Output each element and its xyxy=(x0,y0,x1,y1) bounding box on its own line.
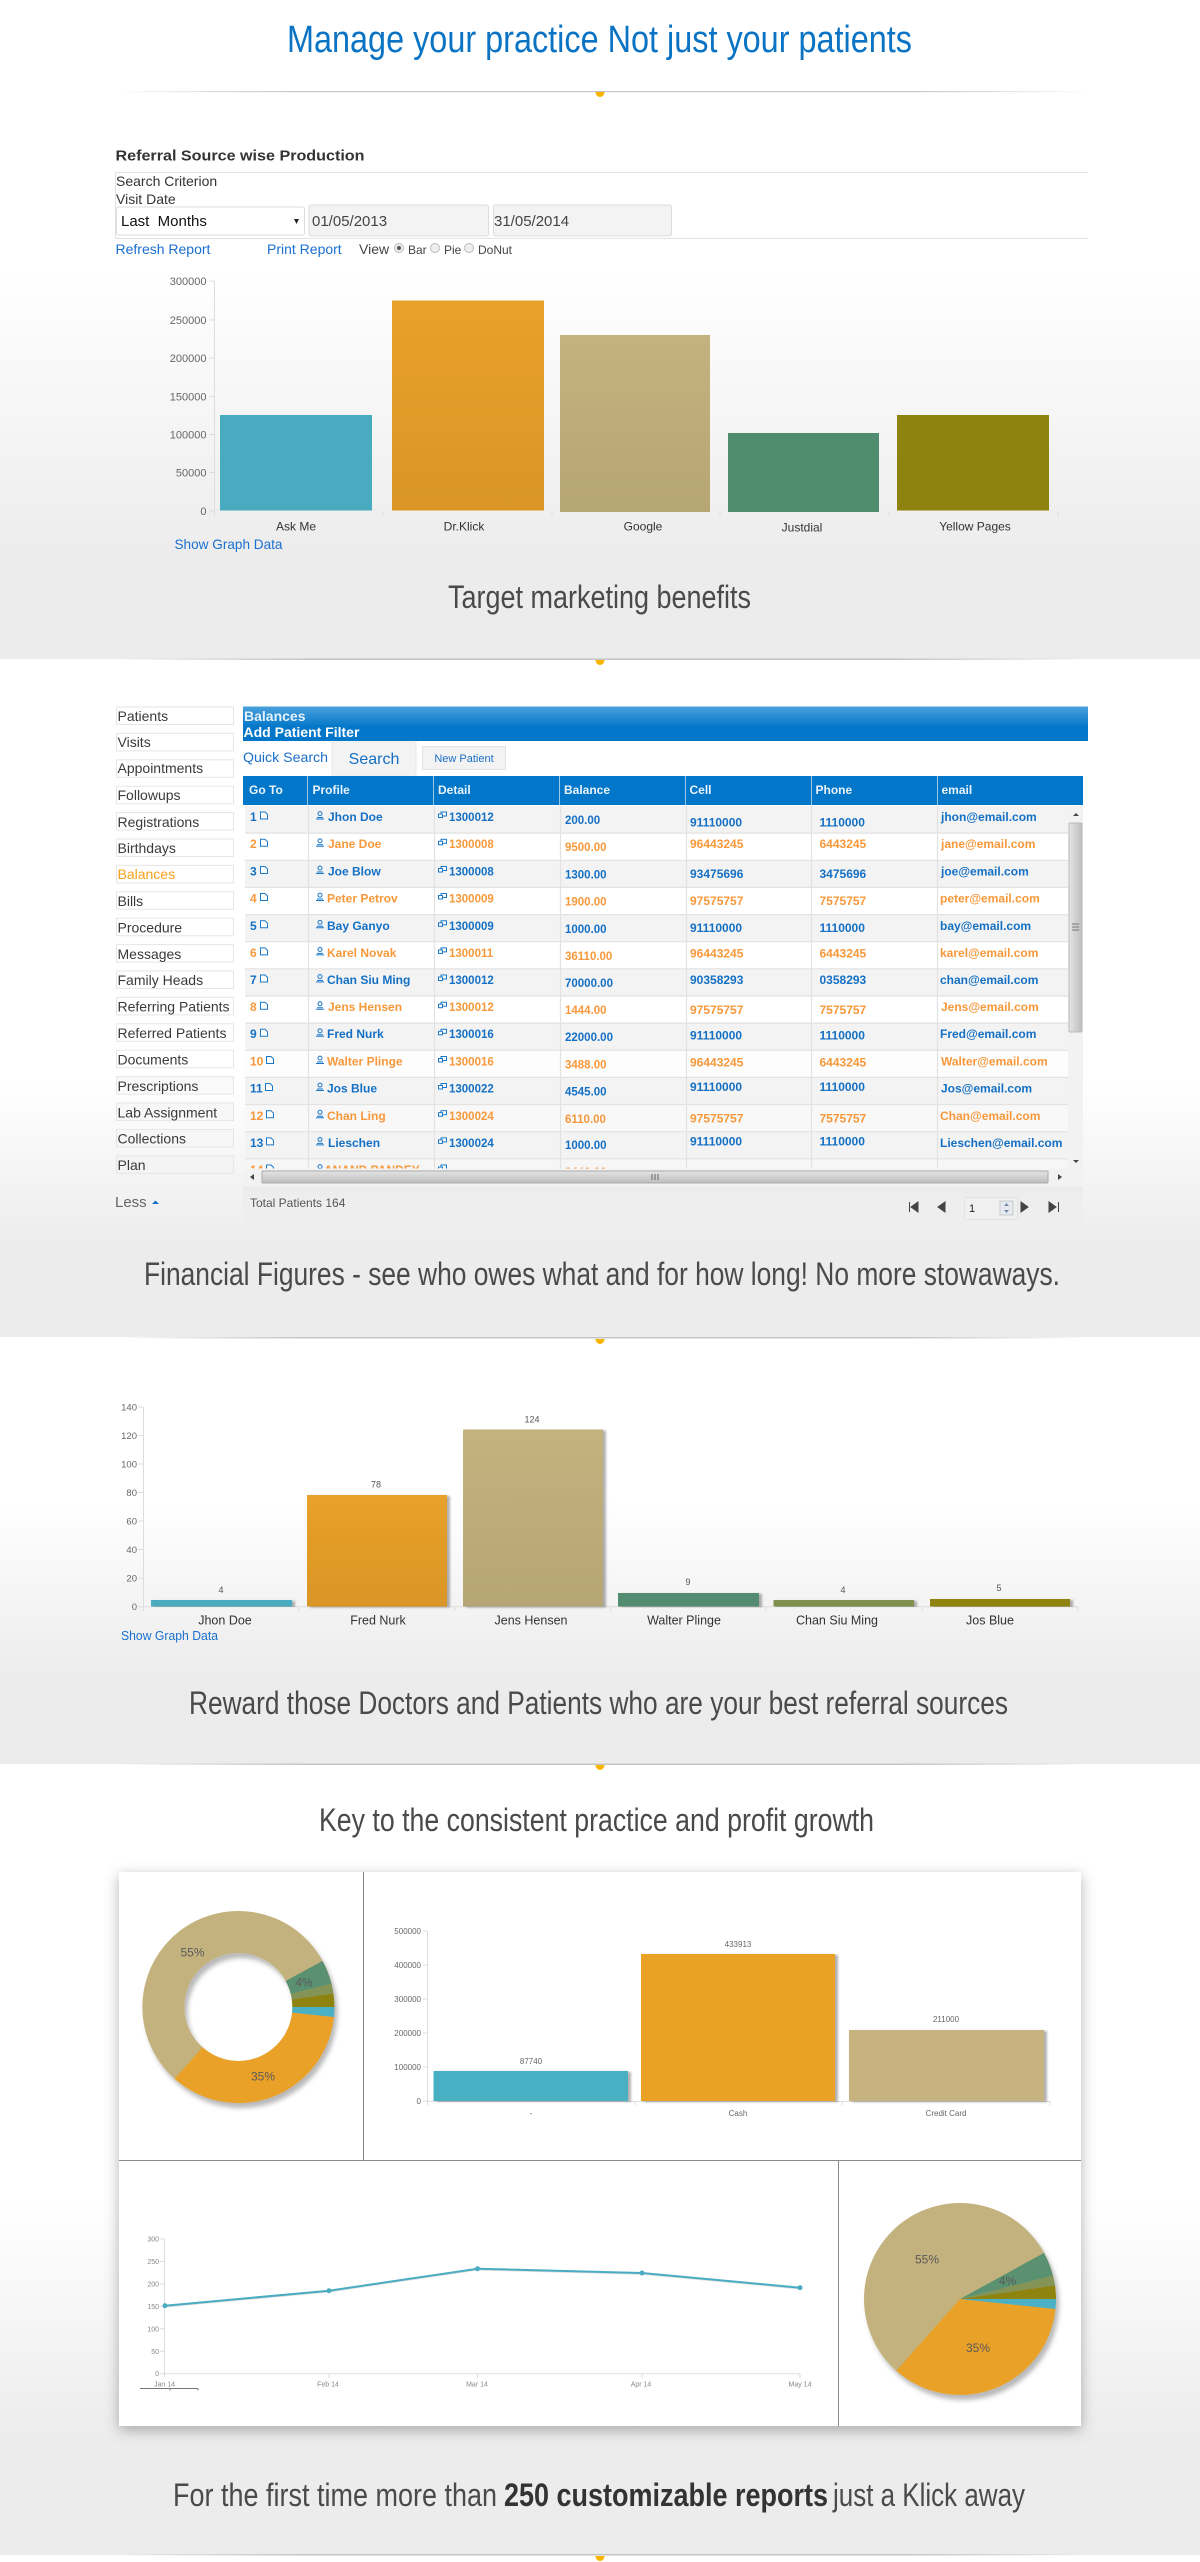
row 11: 91110000 xyxy=(690,1080,742,1094)
row 3: 3 xyxy=(250,864,257,878)
bar chart: payment modes: 400000 xyxy=(394,1961,422,1970)
sidebar menu: Followups xyxy=(118,787,181,803)
row 7: Chan Siu Ming xyxy=(327,973,410,987)
line chart: monthly trend: 100 xyxy=(147,2326,159,2334)
row 2: 2 xyxy=(250,837,257,851)
bar chart: payment modes: 433913 xyxy=(725,1940,752,1949)
report links and view options: Pie xyxy=(444,243,462,257)
row 1: jhon@email.com xyxy=(940,810,1037,824)
divider marker: section 1 xyxy=(115,658,1090,665)
row 10: 96443245 xyxy=(690,1056,744,1070)
donut chart: 35% xyxy=(251,2070,275,2084)
sidebar menu: Visits xyxy=(118,734,151,750)
bar: Chan Siu Ming xyxy=(774,1600,914,1606)
bar chart: referral source production: 300000 xyxy=(170,276,206,288)
divider marker: title xyxy=(115,91,1090,97)
bar chart: referrals per person: Walter Plinge xyxy=(647,1614,721,1628)
row 14 (clipped) xyxy=(250,1164,606,1168)
row 13: Lieschen xyxy=(328,1136,380,1150)
row 13: 1300024 xyxy=(449,1138,494,1150)
bar chart: referrals per person xyxy=(121,1402,1078,1628)
sidebar menu: Patients xyxy=(118,708,168,724)
bar: Credit Card xyxy=(849,2030,1044,2101)
donut chart xyxy=(142,1911,334,2103)
pie chart: 55% xyxy=(915,2252,939,2266)
bar chart: referrals per person: 100 xyxy=(121,1460,137,1470)
bar: Cash xyxy=(641,1954,835,2101)
row 13: 1110000 xyxy=(820,1134,865,1148)
sidebar menu: Less xyxy=(115,1194,147,1211)
row 3: 1300.00 xyxy=(565,870,607,882)
bar chart: referrals per person: 40 xyxy=(126,1545,137,1556)
row 5: 1000.00 xyxy=(565,924,607,936)
sidebar menu: Documents xyxy=(118,1052,188,1068)
row 8 xyxy=(250,1001,1038,1014)
row 5: 5 xyxy=(250,919,257,933)
row 8: 97575757 xyxy=(690,1003,744,1017)
bar: unspecified xyxy=(434,2071,628,2101)
row 2 xyxy=(250,838,1035,851)
bar: Justdial xyxy=(728,433,879,512)
table header: Balance xyxy=(564,783,610,797)
report links and view options: Refresh Report xyxy=(116,241,211,257)
divider marker: section 3 xyxy=(115,1764,1090,1770)
row 7: chan@email.com xyxy=(940,973,1038,987)
bar chart: referrals per person: Jens Hensen xyxy=(495,1614,568,1628)
table header: Detail xyxy=(438,783,471,797)
sidebar menu: Plan xyxy=(118,1157,146,1173)
table header: Go To xyxy=(249,783,283,797)
row 5: bay@email.com xyxy=(940,919,1031,933)
report links and view options: Print Report xyxy=(267,241,342,257)
line chart: monthly trend xyxy=(140,2236,812,2390)
row 1: 1300012 xyxy=(449,812,494,824)
table header: email xyxy=(942,783,972,797)
bar chart: payment modes: 0 xyxy=(417,2097,422,2106)
table header xyxy=(243,776,1083,805)
row 13 xyxy=(250,1137,1062,1149)
row 12: 12 xyxy=(250,1109,264,1123)
line chart: monthly trend: 250 xyxy=(147,2259,159,2266)
row 6: 6443245 xyxy=(820,946,867,960)
sidebar menu: Messages xyxy=(118,946,181,962)
row 6 xyxy=(250,947,1038,960)
bar chart: referral source production: 200000 xyxy=(170,353,206,365)
section background: reports xyxy=(0,1765,1200,2555)
row 3: Joe Blow xyxy=(328,864,381,878)
caption: 250 customizable reports xyxy=(173,2477,1025,2513)
row 12: Chan@email.com xyxy=(940,1109,1040,1123)
bar chart: payment modes: Cash xyxy=(729,2109,747,2118)
row 11: 1110000 xyxy=(820,1080,865,1094)
caption: reward referral sources: Reward those Doctors and Patients who are your best referral sources xyxy=(189,1685,1008,1721)
bar chart: payment modes: 500000 xyxy=(394,1927,422,1936)
title: Manage your practice Not just your patients xyxy=(287,19,912,61)
row 6: 6 xyxy=(250,946,257,960)
divider marker: section 2 xyxy=(115,1337,1090,1344)
line chart: monthly trend: Feb 14 xyxy=(317,2382,339,2388)
row 12: Chan Ling xyxy=(327,1109,386,1123)
row 11: 11 xyxy=(250,1082,263,1096)
row 10: 1300016 xyxy=(449,1056,494,1068)
link: show graph data: Show Graph Data xyxy=(121,1628,219,1643)
bar chart: payment modes xyxy=(394,1927,1050,2118)
row 2: 96443245 xyxy=(690,837,744,851)
donut chart: 4% xyxy=(295,1976,313,1990)
row 4: peter@email.com xyxy=(940,892,1040,906)
row 5: Bay Ganyo xyxy=(327,919,390,933)
row 4: 1900.00 xyxy=(565,896,607,908)
row 10: 10 xyxy=(250,1054,264,1068)
vertical scrollbar xyxy=(1068,806,1083,1169)
line chart: monthly trend: 0 xyxy=(155,2371,159,2378)
row 10: 3488.00 xyxy=(565,1060,607,1072)
bar chart: payment modes: Credit Card xyxy=(926,2109,966,2118)
bar chart: payment modes: 100000 xyxy=(394,2063,422,2072)
row 9: Fred@email.com xyxy=(940,1027,1036,1041)
bar: Jhon Doe xyxy=(151,1600,292,1606)
bar chart: referrals per person: Chan Siu Ming xyxy=(796,1614,878,1628)
row 1: 1 xyxy=(250,810,257,824)
quick search bar xyxy=(243,742,506,775)
divider marker: section 4 xyxy=(115,2554,1090,2561)
row 8: 8 xyxy=(250,1000,257,1014)
sidebar menu: Referring Patients xyxy=(118,998,230,1014)
sidebar menu: Lab Assignment xyxy=(118,1104,217,1120)
bar: Ask Me xyxy=(220,415,372,510)
row 3: joe@email.com xyxy=(940,864,1029,878)
row 5: 91110000 xyxy=(690,921,742,935)
sidebar menu: Bills xyxy=(118,893,143,909)
row 13: 91110000 xyxy=(690,1134,742,1148)
row 12 xyxy=(250,1110,1040,1123)
line chart: monthly trend: 200 xyxy=(147,2282,159,2288)
bar chart: referrals per person: 80 xyxy=(126,1488,137,1499)
table header: Cell xyxy=(690,783,712,797)
row 10 xyxy=(250,1056,1047,1068)
row 3: 93475696 xyxy=(690,867,744,881)
bar chart: referral source production: Dr.Klick xyxy=(444,520,485,534)
panel header: balances: Add Patient Filter xyxy=(244,724,360,740)
section background: balances table xyxy=(0,660,1200,1337)
row 3: 1300008 xyxy=(449,866,494,878)
row 4: 1300009 xyxy=(449,894,494,906)
row 3 xyxy=(250,866,1028,878)
donut chart: 55% xyxy=(180,1946,205,1960)
row 2: 6443245 xyxy=(820,837,867,851)
row 7: 70000.00 xyxy=(565,978,613,990)
sidebar menu: Appointments xyxy=(118,760,203,776)
sidebar menu: Family Heads xyxy=(118,972,203,988)
row 2: 1300008 xyxy=(449,839,494,851)
row 5: 1300009 xyxy=(449,921,494,933)
row 5: 1110000 xyxy=(820,921,865,935)
search criterion form: Last Months xyxy=(121,213,207,230)
row 2: 9500.00 xyxy=(565,842,607,854)
line chart: monthly trend: 50 xyxy=(151,2349,159,2356)
sidebar menu: Prescriptions xyxy=(118,1078,198,1094)
row 14 (clipped): 14 xyxy=(250,1163,264,1177)
bar chart: referrals per person: 78 xyxy=(371,1480,381,1490)
panel header: balances: Balances xyxy=(244,708,306,724)
row 11: Jos@email.com xyxy=(941,1082,1032,1096)
sidebar menu xyxy=(115,707,234,1211)
bar chart: referrals per person: 5 xyxy=(996,1583,1002,1593)
panel: referral source report filters xyxy=(116,148,1088,257)
table footer and pager: 1 xyxy=(969,1203,975,1215)
row 11: 4545.00 xyxy=(565,1086,607,1098)
row 9 xyxy=(250,1028,1036,1041)
bar chart: referrals per person: Jhon Doe xyxy=(198,1614,252,1628)
row 6: 96443245 xyxy=(690,946,744,960)
search criterion form xyxy=(116,172,1088,238)
row 9: 9 xyxy=(250,1027,257,1041)
bar chart: referral source production: 150000 xyxy=(170,392,206,404)
search criterion form: Visit Date xyxy=(116,191,176,207)
row 11: 1300022 xyxy=(449,1084,494,1096)
caption: 250 customizable reports: just a Klick away xyxy=(832,2477,1025,2513)
line chart: monthly trend: Mar 14 xyxy=(466,2382,488,2388)
sidebar menu: Collections xyxy=(118,1130,186,1146)
row 13: 13 xyxy=(250,1136,264,1150)
row 1: 200.00 xyxy=(565,815,600,827)
line chart: monthly trend: 150 xyxy=(147,2304,159,2311)
bar chart: referral source production: Justdial xyxy=(782,520,822,534)
table footer and pager xyxy=(243,1186,1083,1236)
bar chart: payment modes: - xyxy=(530,2109,533,2118)
row 4: 4 xyxy=(250,892,257,906)
report links and view options xyxy=(116,241,513,257)
row 3: 3475696 xyxy=(820,867,867,881)
sidebar menu: Balances xyxy=(118,866,175,882)
row 7 xyxy=(250,974,1038,987)
panel header: balances xyxy=(243,706,1088,741)
line chart: monthly trend: May 14 xyxy=(789,2382,812,2388)
row 1: 91110000 xyxy=(690,816,742,830)
row 12: 7575757 xyxy=(820,1112,867,1126)
caption: 250 customizable reports: For the first time more than xyxy=(173,2477,497,2513)
bar chart: referral source production: 100000 xyxy=(170,430,206,442)
caption: 250 customizable reports: 250 customizable reports xyxy=(504,2477,828,2513)
row 8: 7575757 xyxy=(820,1003,867,1017)
quick search bar: Quick Search xyxy=(243,749,328,765)
row 12: 6110.00 xyxy=(565,1114,606,1126)
bar chart: referral source production: Yellow Pages xyxy=(939,520,1011,534)
bar chart: referrals per person: 4 xyxy=(840,1585,846,1595)
row 7: 7 xyxy=(250,973,257,987)
heading: key to consistent growth: Key to the consistent practice and profit growth xyxy=(319,1802,874,1838)
bar chart: referral source production: Google xyxy=(624,520,663,534)
sidebar menu: Birthdays xyxy=(118,840,176,856)
row 13: 1000.00 xyxy=(565,1140,607,1152)
report links and view options: View xyxy=(359,241,390,257)
bar chart: referral source production: 0 xyxy=(200,506,206,518)
bar chart: referral source production xyxy=(170,276,1058,534)
row 10: 6443245 xyxy=(820,1056,867,1070)
row 5 xyxy=(250,920,1030,933)
bar: Yellow Pages xyxy=(897,415,1049,510)
bar chart: referrals per person: 9 xyxy=(685,1577,691,1587)
pie chart: 4% xyxy=(999,2274,1017,2288)
row 11: Jos Blue xyxy=(327,1082,377,1096)
table: patient balances xyxy=(243,776,1083,1179)
row 7: 0358293 xyxy=(820,973,867,987)
row 4 xyxy=(250,892,1040,906)
row 14 (clipped): 3440.00 xyxy=(565,1167,607,1179)
bar: Dr.Klick xyxy=(392,300,544,510)
bar chart: payment modes: 300000 xyxy=(394,1995,422,2004)
row 4: Peter Petrov xyxy=(327,892,398,906)
report links and view options: Bar xyxy=(408,243,427,257)
sidebar menu: Referred Patients xyxy=(118,1025,226,1041)
row 6: 36110.00 xyxy=(565,951,612,963)
table rows xyxy=(245,806,1068,1179)
row 12: 97575757 xyxy=(690,1112,744,1126)
row 11 xyxy=(250,1082,1032,1096)
bar: Jos Blue xyxy=(930,1599,1070,1606)
bar chart: referrals per person: 124 xyxy=(524,1414,540,1424)
sidebar menu: Procedure xyxy=(118,920,182,936)
bar chart: referral source production: Ask Me xyxy=(276,520,316,534)
quick search bar: New Patient xyxy=(434,753,494,765)
row 8: Jens Hensen xyxy=(328,1000,402,1014)
row 4: 7575757 xyxy=(820,894,867,908)
line chart: monthly trend: Jan 14 xyxy=(154,2382,175,2388)
row 10: Walter@email.com xyxy=(941,1054,1048,1068)
row 12: 1300024 xyxy=(449,1111,494,1123)
bar chart: referrals per person: 20 xyxy=(126,1574,137,1584)
bar chart: referrals per person: 60 xyxy=(126,1516,137,1528)
row 1 xyxy=(250,811,1036,826)
row 9: 1300016 xyxy=(449,1029,494,1041)
bar chart: referrals per person: 4 xyxy=(218,1585,224,1595)
bar chart: referrals per person: 0 xyxy=(132,1602,137,1613)
bar chart: referral source production: 50000 xyxy=(176,468,206,480)
horizontal scrollbar xyxy=(243,1169,1083,1185)
report links and view options: DoNut xyxy=(478,243,513,257)
search criterion form: Search Criterion xyxy=(116,173,217,189)
bar chart: payment modes: 87740 xyxy=(520,2057,543,2066)
pie chart: 35% xyxy=(966,2341,990,2355)
bar chart: referrals per person: Jos Blue xyxy=(966,1614,1014,1628)
row 6: 1300011 xyxy=(449,948,494,960)
section background: intro and referral chart xyxy=(0,0,1200,659)
caption: target marketing benefits: Target marketing benefits xyxy=(448,579,751,615)
row 4: 97575757 xyxy=(690,894,744,908)
line chart: monthly trend: 300 xyxy=(147,2236,159,2244)
bar chart: referral source production: 250000 xyxy=(170,315,206,327)
row 13: Lieschen@email.com xyxy=(940,1136,1062,1150)
row 6: karel@email.com xyxy=(940,946,1038,960)
row 9: Fred Nurk xyxy=(327,1027,384,1041)
panel: report dashboard xyxy=(119,1872,1081,2426)
row 14 (clipped): ANAND PANDEY xyxy=(324,1163,420,1177)
bar: Jens Hensen xyxy=(463,1430,603,1606)
row 8: Jens@email.com xyxy=(941,1000,1039,1014)
bar: Fred Nurk xyxy=(307,1495,447,1606)
row 8: 1300012 xyxy=(449,1002,494,1014)
row 7: 90358293 xyxy=(690,973,744,987)
row 1: 1110000 xyxy=(820,816,865,830)
bar chart: referrals per person: 140 xyxy=(121,1402,137,1414)
row 2: Jane Doe xyxy=(328,837,382,851)
row 1: Jhon Doe xyxy=(328,810,383,824)
table header: Phone xyxy=(816,783,852,797)
pie chart xyxy=(864,2203,1056,2395)
search criterion form: 31/05/2014 xyxy=(494,213,569,230)
row 9: 91110000 xyxy=(690,1028,742,1042)
row 2: jane@email.com xyxy=(940,837,1035,851)
table header: Profile xyxy=(312,783,350,797)
row 10: Walter Plinge xyxy=(327,1054,403,1068)
row 9: 1110000 xyxy=(820,1028,865,1042)
section background: best referral sources xyxy=(0,1338,1200,1764)
table footer and pager: Total Patients 164 xyxy=(250,1196,346,1210)
line chart: monthly trend: Apr 14 xyxy=(631,2382,651,2388)
heading: referral source wise production: Referral Source wise Production xyxy=(116,148,364,164)
bar chart: payment modes: 200000 xyxy=(394,2029,422,2038)
bar: Google xyxy=(560,335,710,512)
sidebar menu: Registrations xyxy=(118,814,199,830)
bar: Walter Plinge xyxy=(618,1593,759,1606)
row 9: 22000.00 xyxy=(565,1032,613,1044)
search criterion form: 01/05/2013 xyxy=(312,213,387,230)
row 8: 1444.00 xyxy=(565,1005,607,1017)
bar chart: referrals per person: 120 xyxy=(121,1431,137,1442)
bar chart: referrals per person: Fred Nurk xyxy=(350,1614,407,1628)
link: show graph data: Show Graph Data xyxy=(174,536,283,552)
row 6: Karel Novak xyxy=(327,946,397,960)
row 7: 1300012 xyxy=(449,975,494,987)
quick search bar: Search xyxy=(349,751,399,768)
bar chart: payment modes: 211000 xyxy=(933,2015,960,2024)
